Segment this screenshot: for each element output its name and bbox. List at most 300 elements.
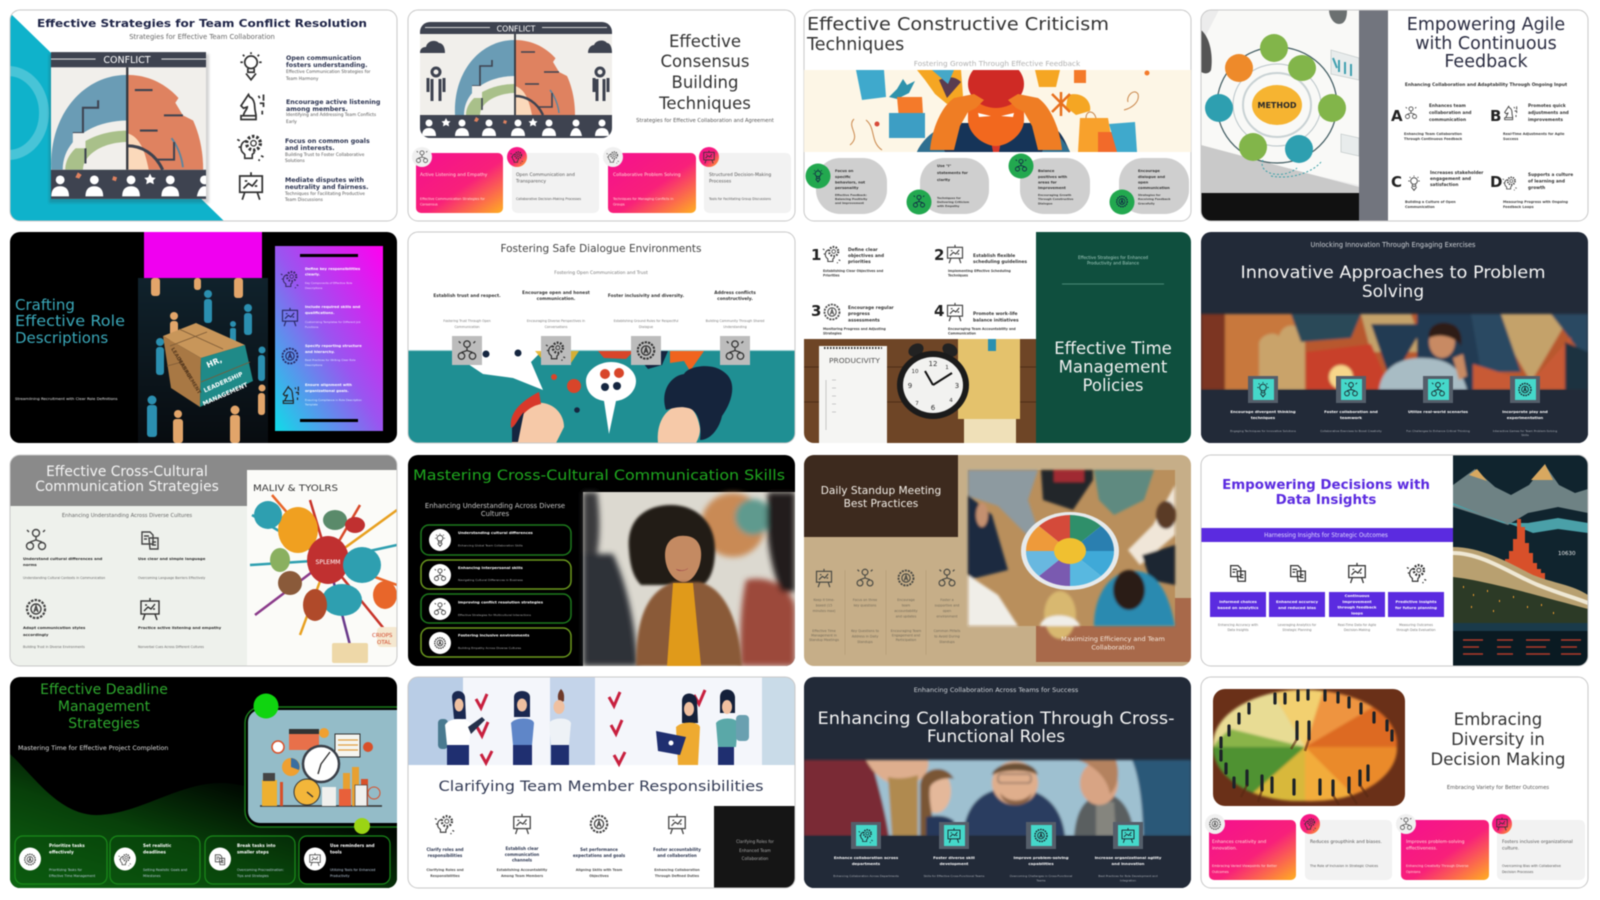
item detail: Overcoming Language Barriers Effectively: [138, 576, 205, 580]
column 1: [833, 822, 899, 878]
clock numerals: 6: [931, 404, 936, 412]
item 3: [23, 600, 86, 649]
card text: Open Communication and: [516, 172, 575, 178]
number: 4: [934, 302, 944, 320]
box 2: [110, 836, 200, 884]
card text: Consensus: [420, 202, 438, 206]
panel: diversity in decision making slide: [1201, 677, 1588, 888]
panel subtitle: Effective Strategies for Enhanced: [1078, 255, 1148, 260]
column detail: Enhancing Collaboration: [654, 868, 700, 872]
card text: Transparency: [515, 178, 546, 184]
column detail: Building Community Through Shared: [706, 319, 764, 323]
item heading: fosters understanding.: [286, 62, 368, 69]
item detail: Implementing Effective Scheduling: [948, 269, 1011, 273]
column detail: Teams: [1035, 878, 1046, 882]
card text: Decision Processes: [1502, 870, 1534, 874]
item detail: Real-Time Adjustments for Agile: [1503, 132, 1565, 136]
item heading: assessments: [848, 318, 880, 324]
list item 1: clearly.: [305, 272, 321, 276]
column detail: Best Practices for Role Development and: [1098, 874, 1158, 878]
icon: easel chart: [948, 303, 962, 321]
pill detail: Techniques for: [937, 196, 961, 200]
column detail: Conversations: [545, 325, 568, 329]
column 3: [1010, 822, 1073, 882]
box text: for future planning: [1395, 605, 1437, 610]
title: Mastering Cross-Cultural Communication Skills: [413, 468, 785, 484]
card: inclusive culture: [1492, 814, 1585, 880]
column detail: Skills: [1521, 433, 1529, 437]
cube labels: LEADERSHIP: [169, 347, 193, 380]
card border: [1201, 455, 1588, 666]
column text: environment: [936, 614, 958, 618]
column text: Foster a: [940, 598, 954, 602]
column heading: constructively.: [717, 296, 753, 302]
column heading: Enhance collaboration across: [834, 855, 899, 860]
card text: Improves problem-solving: [1406, 839, 1465, 845]
icon: gears: [1304, 819, 1316, 830]
list item 4: Ensuring Compliance in Role Description: [305, 398, 362, 402]
column heading: departments: [852, 861, 881, 866]
card text: effectiveness.: [1406, 846, 1437, 852]
column heading: Foster collaboration and: [1324, 409, 1378, 414]
card border: [1201, 10, 1588, 221]
bottom right caption: Maximizing Efficiency and Team: [1061, 635, 1165, 643]
item heading: Encourage active listening: [286, 99, 380, 106]
item heading: adjustments and: [1528, 110, 1569, 116]
box text: Enhanced accuracy: [1276, 599, 1318, 604]
box text: Set realistic: [143, 843, 172, 848]
pill heading: communication: [1138, 186, 1170, 190]
title: Functional Roles: [927, 727, 1065, 747]
column detail: Understanding: [723, 325, 747, 329]
icon: easel: [948, 245, 962, 263]
item heading: Define clear: [848, 247, 879, 253]
column text: Management in: [811, 634, 837, 638]
card text: Embracing Varied Viewpoints for Better: [1212, 864, 1278, 868]
pill detail: Effective Feedback:: [835, 193, 867, 197]
column detail: Establishing Accountability: [497, 868, 548, 872]
card border: [408, 232, 795, 443]
number: 2: [934, 246, 944, 264]
image: team collaborating: [804, 760, 1191, 836]
column detail: Among Team Members: [501, 874, 543, 878]
column detail: Through Defined Duties: [655, 874, 699, 878]
column detail: Measuring Outcomes: [1399, 623, 1433, 627]
gradient list panel: [275, 246, 383, 431]
column text: and updates: [896, 614, 917, 618]
column detail: Overcoming Challenges in Cross-Functional: [1010, 874, 1073, 878]
list item 3: and hierarchy.: [305, 350, 335, 354]
column heading: communication.: [537, 296, 576, 302]
item text: Improving conflict resolution strategies: [458, 600, 544, 604]
cube labels: HR,: [205, 355, 223, 370]
card: creativity: [1205, 814, 1296, 880]
panel: deadline management slide: [10, 677, 418, 888]
column 3: [573, 816, 626, 878]
column text: Address in Daily: [852, 634, 878, 638]
clock numerals: 7: [915, 401, 919, 407]
panel: agile continuous feedback slide: [1201, 10, 1588, 221]
title: Empowering Agile: [1407, 15, 1565, 35]
icon: bulb: [1408, 176, 1420, 190]
icon: bulb: [1257, 382, 1269, 397]
column heading: Clarify roles and: [426, 847, 464, 852]
column text: Encourage: [897, 598, 915, 602]
icon: gear bulb: [435, 816, 454, 834]
mind map centre label: SPLEMM: [316, 559, 340, 566]
column 1: [809, 569, 839, 642]
item C: [1391, 170, 1484, 209]
list item 3: Descriptions: [305, 363, 323, 367]
title: Clarifying Team Member Responsibilities: [438, 778, 764, 795]
column 4: [706, 290, 764, 365]
column 1: [1210, 566, 1266, 632]
item heading: Practice active listening and empathy: [138, 625, 222, 630]
icon: gear bulb: [859, 830, 873, 843]
column text: Engagement and: [892, 634, 920, 638]
card: active listening: [412, 147, 503, 213]
list item 4: Template: [304, 402, 318, 406]
column heading: teamwork: [1340, 415, 1362, 420]
image: conflict illustration: [420, 22, 612, 138]
list item 2: Include required skills and: [305, 305, 361, 309]
pill heading: specific: [835, 175, 851, 179]
card surface: [408, 10, 795, 221]
icon: gears: [511, 152, 523, 163]
number: 1: [811, 246, 821, 264]
pill: use I statements: [906, 158, 989, 214]
column detail: Aligning Skills with Team: [576, 868, 623, 872]
list item 2: [421, 560, 571, 589]
column heading: Improve problem-solving: [1014, 855, 1069, 860]
subtitle: Cultures: [481, 510, 510, 518]
card text: The Role of Inclusion in Strategic Choices: [1309, 864, 1378, 868]
card surface: [10, 14, 224, 222]
icon: person: [26, 530, 46, 550]
title: Effective Role: [15, 312, 125, 330]
icon: chart easel: [669, 814, 685, 834]
item 1: [811, 246, 884, 278]
title: Decision Making: [1431, 750, 1565, 769]
title: Effective Time: [1054, 339, 1172, 358]
column detail: Enhancing Collaboration Across Departments: [833, 874, 899, 878]
card text: Processes: [709, 178, 732, 184]
column detail: Decision-Making: [1344, 628, 1370, 632]
item detail: Success: [1503, 137, 1518, 141]
icon: network: [434, 569, 446, 581]
column heading: Foster accountability: [653, 847, 701, 852]
title: Techniques: [658, 94, 751, 113]
column detail: Data Insights: [1227, 628, 1249, 632]
box text: based on analytics: [1217, 605, 1259, 610]
item heading: Encourage regular: [848, 305, 895, 311]
column 3: [1329, 563, 1385, 632]
column text: team: [902, 604, 910, 608]
item detail: Techniques for Facilitating Productive: [284, 191, 365, 197]
panel: daily standup slide: [804, 455, 1191, 666]
item heading: communication: [1429, 117, 1466, 123]
column text: minutes max): [813, 609, 835, 613]
item heading: Promote work-life: [973, 311, 1017, 317]
diagram: method cycle: [1205, 34, 1346, 177]
pill detail: Encouraging Growth: [1038, 193, 1071, 197]
panel: data insights slide: [1201, 455, 1588, 666]
card surface: [10, 677, 418, 888]
icon: documents: [1231, 566, 1245, 581]
title: Enhancing Collaboration Through Cross-: [818, 709, 1174, 729]
title: Solving: [1362, 282, 1424, 302]
icon: chess knight: [1505, 106, 1517, 120]
box text: smaller steps: [237, 850, 269, 854]
item text: Understanding cultural differences: [458, 530, 534, 535]
pill: encourage dialogue: [1110, 158, 1189, 214]
column text: Participation: [896, 638, 916, 642]
panel: team responsibilities slide: [408, 677, 795, 888]
icon: network: [458, 341, 476, 359]
card surface: [804, 232, 1191, 443]
item heading: Promotes quick: [1528, 103, 1566, 109]
letter: B: [1490, 107, 1501, 125]
icon: easel: [948, 828, 960, 843]
card surface: [408, 348, 796, 444]
icon: bulb: [435, 534, 445, 546]
icon: head gear: [591, 816, 607, 832]
item heading: progress: [848, 311, 870, 317]
item heading: engagement and: [1430, 176, 1471, 182]
pill heading: open: [1138, 180, 1149, 184]
banner text: Harnessing Insights for Strategic Outcomes: [1264, 533, 1388, 539]
column 2: [522, 290, 590, 365]
card border: [10, 455, 397, 666]
item heading: balance initiatives: [973, 318, 1019, 324]
card text: Fosters inclusive organizational: [1502, 839, 1573, 845]
card surface: [804, 10, 1191, 221]
card: open communication: [507, 147, 599, 213]
column heading: experimentation: [1507, 415, 1543, 420]
pill heading: clarity: [937, 178, 951, 182]
icon: network: [1432, 382, 1444, 396]
subtitle: Enhancing Understanding Across Diverse: [425, 502, 565, 510]
box text: Use reminders and: [330, 843, 375, 848]
column heading: capabilities: [1028, 861, 1054, 866]
column 2: [1320, 376, 1382, 433]
card surface: [1201, 232, 1588, 443]
panel: safe dialogue slide: [408, 232, 795, 443]
icon: target: [25, 854, 35, 865]
item heading: among members.: [286, 106, 348, 113]
column 4: [653, 814, 701, 878]
box text: improvement: [1342, 599, 1372, 604]
cube labels: MANAGEMENT: [202, 381, 250, 408]
card text: Enhances creativity and: [1212, 839, 1266, 845]
icon: gear: [119, 855, 131, 866]
item heading: Supports a culture: [1528, 172, 1573, 178]
subtitle: Enhancing Understanding Across Diverse Cultures: [62, 513, 192, 519]
image label: conflict: CONFLICT: [103, 55, 151, 66]
title: Diversity in: [1451, 730, 1545, 749]
column detail: Fun Challenges to Enhance Critical Thinking: [1406, 429, 1470, 433]
icon: chart easel: [1122, 828, 1134, 843]
title: Embracing: [1454, 710, 1542, 729]
card text: Opinions: [1406, 870, 1421, 874]
icon: board: [141, 598, 159, 620]
item detail: Measuring Progress with Ongoing: [1503, 200, 1568, 204]
icon: target: [27, 600, 45, 618]
box text: loops: [1351, 610, 1364, 616]
mind map corner label: CRIOPS: [372, 633, 393, 639]
card text: culture.: [1502, 846, 1519, 852]
icon: team: [1497, 818, 1507, 830]
column heading: Address conflicts: [714, 290, 756, 296]
card text: Groups: [613, 202, 625, 206]
icon: gear bulb: [237, 136, 264, 161]
subtitle: Fostering Growth Through Effective Feedback: [914, 59, 1081, 68]
item text: Building Empathy Across Diverse Cultures: [458, 646, 522, 650]
item heading: improvements: [1528, 117, 1563, 123]
column heading: development: [940, 861, 968, 866]
icon: gear head: [1035, 830, 1047, 842]
title: Effective Cross-Cultural: [46, 464, 208, 480]
item detail: Communication: [1405, 205, 1435, 209]
panel: cross-cultural strategies slide: [10, 455, 399, 666]
item detail: Team Harmony: [285, 76, 319, 82]
item: mediate disputes: [240, 172, 369, 203]
card text: Structured Decision-Making: [709, 172, 771, 178]
item heading: of learning and: [1528, 178, 1565, 184]
item detail: Understanding Cultural Contexts in Communication: [23, 576, 105, 580]
item heading: Mediate disputes with: [285, 177, 364, 184]
column detail: Engaging Techniques for Innovative Solutions: [1230, 429, 1296, 433]
item heading: Open communication: [286, 55, 361, 62]
box text: Overcoming Procrastination:: [237, 868, 284, 872]
column 3: [891, 570, 921, 642]
card surface: [10, 455, 399, 666]
column heading: Establish clear: [505, 846, 539, 851]
column detail: Objectives: [589, 874, 609, 878]
panel subtitle: Productivity and Balance: [1087, 260, 1139, 266]
clock numerals: 12: [929, 360, 937, 368]
title: Management: [1059, 358, 1168, 376]
pill detail: and Improvement: [835, 201, 865, 205]
clock numerals: 1: [945, 365, 949, 371]
item heading: scheduling guidelines: [973, 259, 1027, 265]
item detail: Effective Communication Strategies for: [286, 69, 371, 75]
card surface: [1201, 677, 1588, 888]
column 1: [433, 293, 501, 365]
card surface: [10, 232, 397, 443]
icon: tasks: [215, 855, 225, 865]
item heading: priorities: [848, 259, 871, 265]
icon: network: [1015, 159, 1027, 171]
panel: innovative problem solving slide: [1201, 232, 1588, 443]
box text: Prioritize tasks: [49, 843, 85, 848]
image: team with checklists: [408, 677, 795, 765]
list item 3: Specify reporting structure: [305, 344, 362, 348]
column detail: Real-Time Data for Agile: [1338, 623, 1376, 627]
icon: network: [939, 569, 955, 586]
column detail: through Data Evaluation: [1397, 628, 1435, 632]
column heading: responsibilities: [428, 853, 463, 858]
icon: easel: [816, 569, 832, 587]
subtitle: Unlocking Innovation Through Engaging Exercises: [1311, 241, 1476, 249]
column heading: Set performance: [580, 847, 618, 852]
card text: Outcomes: [1212, 870, 1229, 874]
column heading: Increase organizational agility: [1095, 855, 1162, 860]
column 4: [1493, 376, 1557, 437]
diagram centre label: METHOD: [1257, 101, 1297, 110]
number: 3: [811, 302, 821, 320]
card surface: [804, 455, 1191, 666]
subtitle: Embracing Variety for Better Outcomes: [1447, 785, 1549, 791]
icon: head gear: [638, 342, 654, 359]
icon: gear: [435, 638, 445, 648]
column heading: channels: [512, 858, 533, 862]
column 3: [608, 293, 684, 365]
item detail: Early: [286, 119, 297, 125]
item heading: Enhances team: [1429, 103, 1466, 109]
column text: boxed (15: [816, 604, 832, 608]
clock numerals: [908, 360, 959, 412]
box text: effectively: [49, 850, 74, 854]
column detail: Fostering Trust Through Open: [443, 319, 491, 323]
column detail: Dialogue: [639, 325, 653, 329]
column 2: [497, 814, 548, 878]
icon: target team: [898, 570, 914, 586]
box text: tools: [330, 850, 342, 854]
icon: chess knight: [241, 94, 264, 120]
box text: Productivity: [330, 874, 350, 878]
clock numerals: 10: [912, 369, 919, 375]
list item 1: Key Components of Effective Role: [305, 281, 353, 285]
icon: gear: [282, 348, 298, 364]
letter: A: [1391, 107, 1403, 125]
box text: through feedback: [1338, 604, 1377, 610]
panel: constructive criticism slide: [804, 10, 1191, 221]
item 3: [811, 302, 895, 336]
item detail: Feedback Loops: [1503, 205, 1534, 209]
title: Innovative Approaches to Problem: [1240, 263, 1546, 283]
box text: Break tasks into: [237, 843, 276, 848]
pill heading: improvement: [1038, 186, 1066, 190]
box text: Tips and Strategies: [236, 874, 269, 878]
pill detail: Dialogue: [1038, 202, 1052, 206]
icon: easel: [282, 308, 298, 326]
item detail: Strategies: [823, 332, 842, 336]
box text: Milestones: [143, 874, 161, 878]
item heading: neutrality and fairness.: [285, 184, 369, 191]
item detail: Building a Culture of Open: [1405, 200, 1456, 204]
column text: Standup Meetings: [809, 638, 839, 642]
icon: gear bulb: [1503, 177, 1517, 190]
box text: and reduced bias: [1278, 605, 1317, 610]
letter: C: [1391, 173, 1402, 191]
card text: Collaborative Problem Solving: [613, 172, 681, 178]
subtitle: Streamlining Recruitment with Clear Role Definitions: [15, 396, 118, 401]
title: with Continuous: [1415, 34, 1557, 54]
icon: dashboard: [1349, 563, 1365, 583]
pill: focus on behaviors: [806, 158, 887, 214]
item text: Enhancing Global Team Collaboration Skills: [458, 544, 523, 548]
pill heading: personality: [835, 186, 859, 190]
card surface: [1201, 455, 1588, 666]
icon: gear: [1519, 384, 1531, 396]
item detail: Through Continuous Feedback: [1404, 137, 1463, 141]
column 2: [1269, 566, 1325, 632]
column 4: [934, 569, 961, 644]
column 2: [851, 569, 879, 644]
item 4: [934, 302, 1019, 336]
title: Feedback: [1444, 52, 1529, 72]
